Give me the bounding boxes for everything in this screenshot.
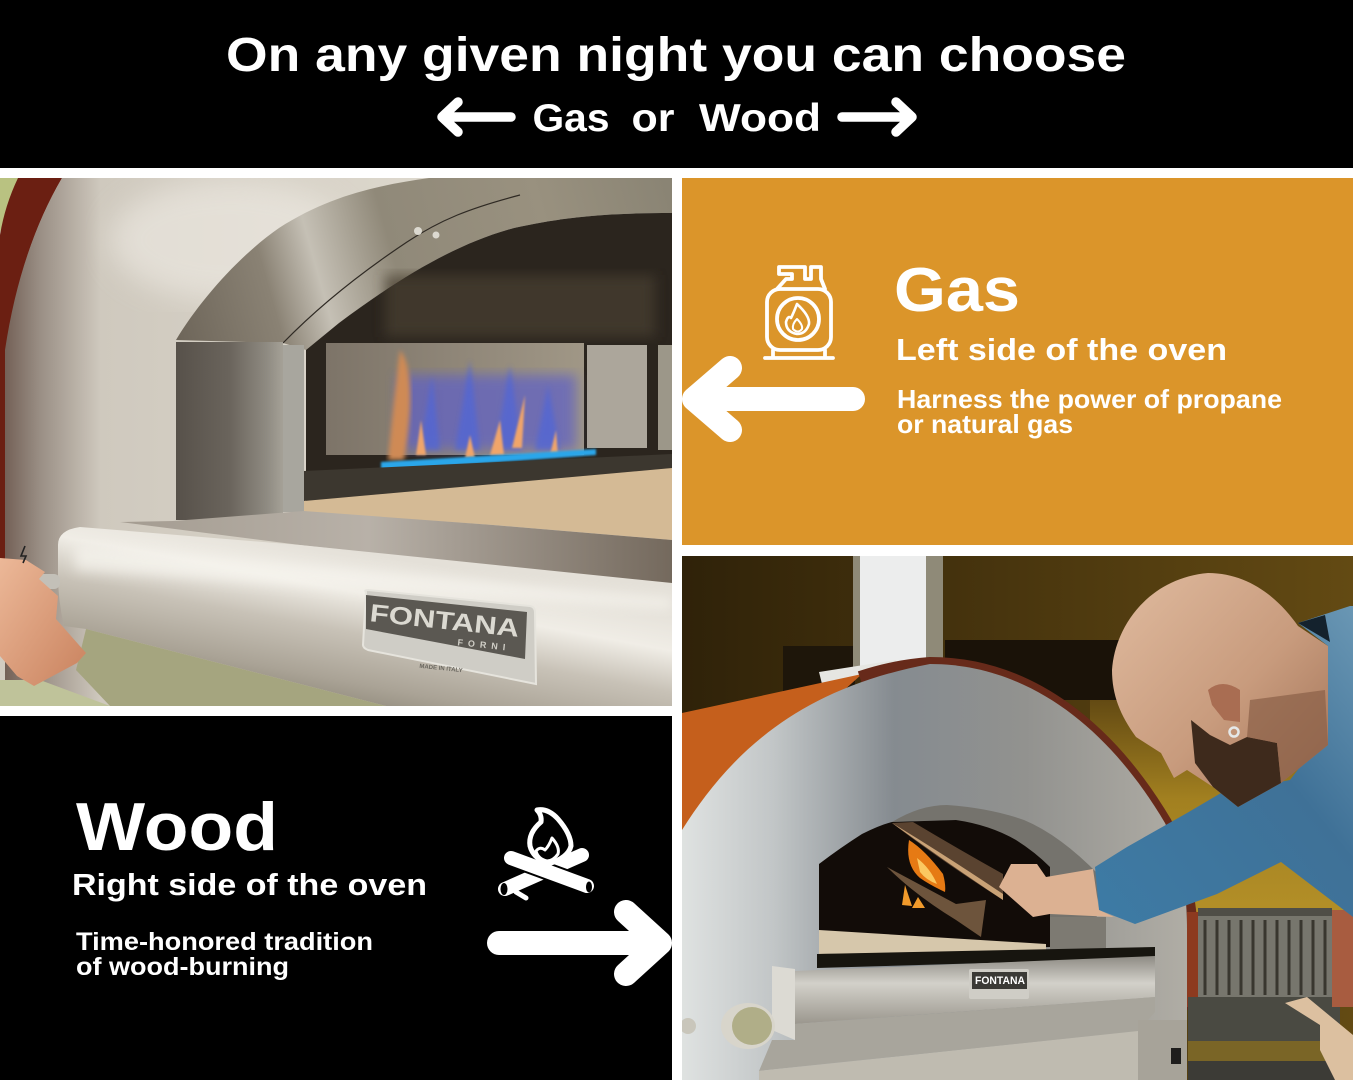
foliage corner bbox=[0, 178, 20, 232]
counter top plane bbox=[120, 511, 672, 585]
steel dome bbox=[682, 664, 1187, 1080]
icon: campfire bbox=[500, 810, 592, 898]
shirt collar dark bbox=[1298, 615, 1330, 642]
lower door bbox=[759, 1031, 1138, 1080]
subtitle word: Wood: Wood bbox=[699, 97, 821, 140]
subtitle word: Gas: Gas bbox=[532, 97, 610, 140]
heading: Gas: Gas bbox=[894, 256, 1020, 325]
orange dome side bbox=[682, 674, 860, 830]
counter highlight band bbox=[75, 545, 672, 610]
arrow: gas left bbox=[694, 368, 853, 430]
dome highlight bbox=[110, 180, 350, 300]
small bolt mark bbox=[21, 546, 26, 563]
rivets bbox=[414, 227, 440, 238]
interior back soft tone bbox=[385, 275, 655, 337]
subheading: right side: Right side of the oven bbox=[72, 867, 427, 902]
chamber back wall bbox=[326, 343, 584, 455]
counter front bbox=[58, 527, 672, 706]
dark window right bbox=[945, 640, 1120, 700]
icon: gas cylinder bbox=[765, 267, 833, 358]
photo: wood-fired oven with man bbox=[680, 556, 1353, 1080]
dark red rim bbox=[860, 664, 1191, 1010]
description: natural gas: or natural gas bbox=[897, 409, 1073, 439]
door jamb right face bbox=[283, 345, 304, 512]
neck stubble bbox=[1247, 690, 1328, 783]
oven arch trim bbox=[176, 178, 672, 350]
badge made in italy: MADE IN ITALY bbox=[419, 664, 463, 674]
brick bbox=[1332, 910, 1353, 1007]
description: wood-burning: of wood-burning bbox=[76, 953, 289, 981]
description: tradition: Time-honored tradition bbox=[76, 928, 373, 956]
chimney bbox=[853, 556, 943, 671]
stone floor bbox=[304, 468, 672, 540]
knob stem bbox=[39, 574, 58, 589]
chimney collar bbox=[819, 660, 896, 684]
door jamb left face bbox=[176, 342, 283, 520]
held log bbox=[892, 822, 1003, 900]
burning log bbox=[887, 867, 986, 937]
right leg bbox=[1138, 1020, 1187, 1080]
badge word: FONTANA bbox=[368, 599, 521, 643]
lower reflection bbox=[76, 629, 386, 706]
Fontana badge bbox=[363, 590, 536, 684]
black counter lip bbox=[817, 947, 1155, 968]
title: On any given night you can choose bbox=[226, 29, 1126, 82]
beard bbox=[1191, 720, 1281, 807]
dark window left bbox=[783, 646, 855, 696]
arrow: header left bbox=[442, 102, 511, 132]
red strip bbox=[1187, 912, 1198, 1007]
left corner piece bbox=[772, 966, 795, 1040]
arrow: header right bbox=[842, 102, 912, 132]
lower ochre wall bbox=[1090, 700, 1353, 920]
ear bbox=[1208, 684, 1240, 722]
panel: wood bbox=[0, 716, 672, 1080]
fire bbox=[902, 840, 945, 908]
red dome edge bbox=[0, 178, 62, 560]
Fontana badge bbox=[969, 969, 1029, 999]
badge word: FONTANA bbox=[975, 975, 1025, 987]
subtitle word: or: or bbox=[632, 97, 674, 140]
lower cabinet bbox=[0, 680, 110, 706]
bench bbox=[1188, 908, 1353, 1080]
stone floor bbox=[819, 930, 1046, 954]
subheading: left side: Left side of the oven bbox=[896, 332, 1227, 367]
heading: Wood: Wood bbox=[76, 789, 278, 865]
arrow: wood right bbox=[499, 912, 660, 974]
oven opening bbox=[819, 820, 1050, 954]
ledge under flames bbox=[304, 454, 672, 501]
steel dome body bbox=[5, 178, 427, 700]
oven interior bbox=[306, 213, 672, 505]
control knob bbox=[721, 1003, 775, 1049]
panel: gas bbox=[682, 178, 1353, 545]
small knob bbox=[680, 1018, 696, 1034]
arm bbox=[999, 864, 1114, 917]
badge sub word: FORNI bbox=[457, 637, 511, 653]
flames bbox=[381, 350, 596, 471]
held log pale edge bbox=[892, 823, 1003, 900]
vent slot bbox=[1171, 1048, 1181, 1064]
photo: gas flame in oven bbox=[0, 178, 672, 706]
firewood pile bbox=[1285, 997, 1353, 1080]
earring bbox=[1230, 728, 1238, 736]
right jamb bbox=[1050, 917, 1106, 949]
arch seam bbox=[283, 195, 520, 343]
description: propane: Harness the power of propane bbox=[897, 384, 1282, 414]
lower band bbox=[759, 997, 1155, 1071]
hand bbox=[0, 558, 86, 686]
front panel bbox=[795, 956, 1155, 1024]
header banner bbox=[0, 0, 1353, 168]
head bbox=[1112, 573, 1328, 807]
shirt bbox=[1095, 606, 1353, 924]
arch trim bbox=[892, 805, 1099, 950]
